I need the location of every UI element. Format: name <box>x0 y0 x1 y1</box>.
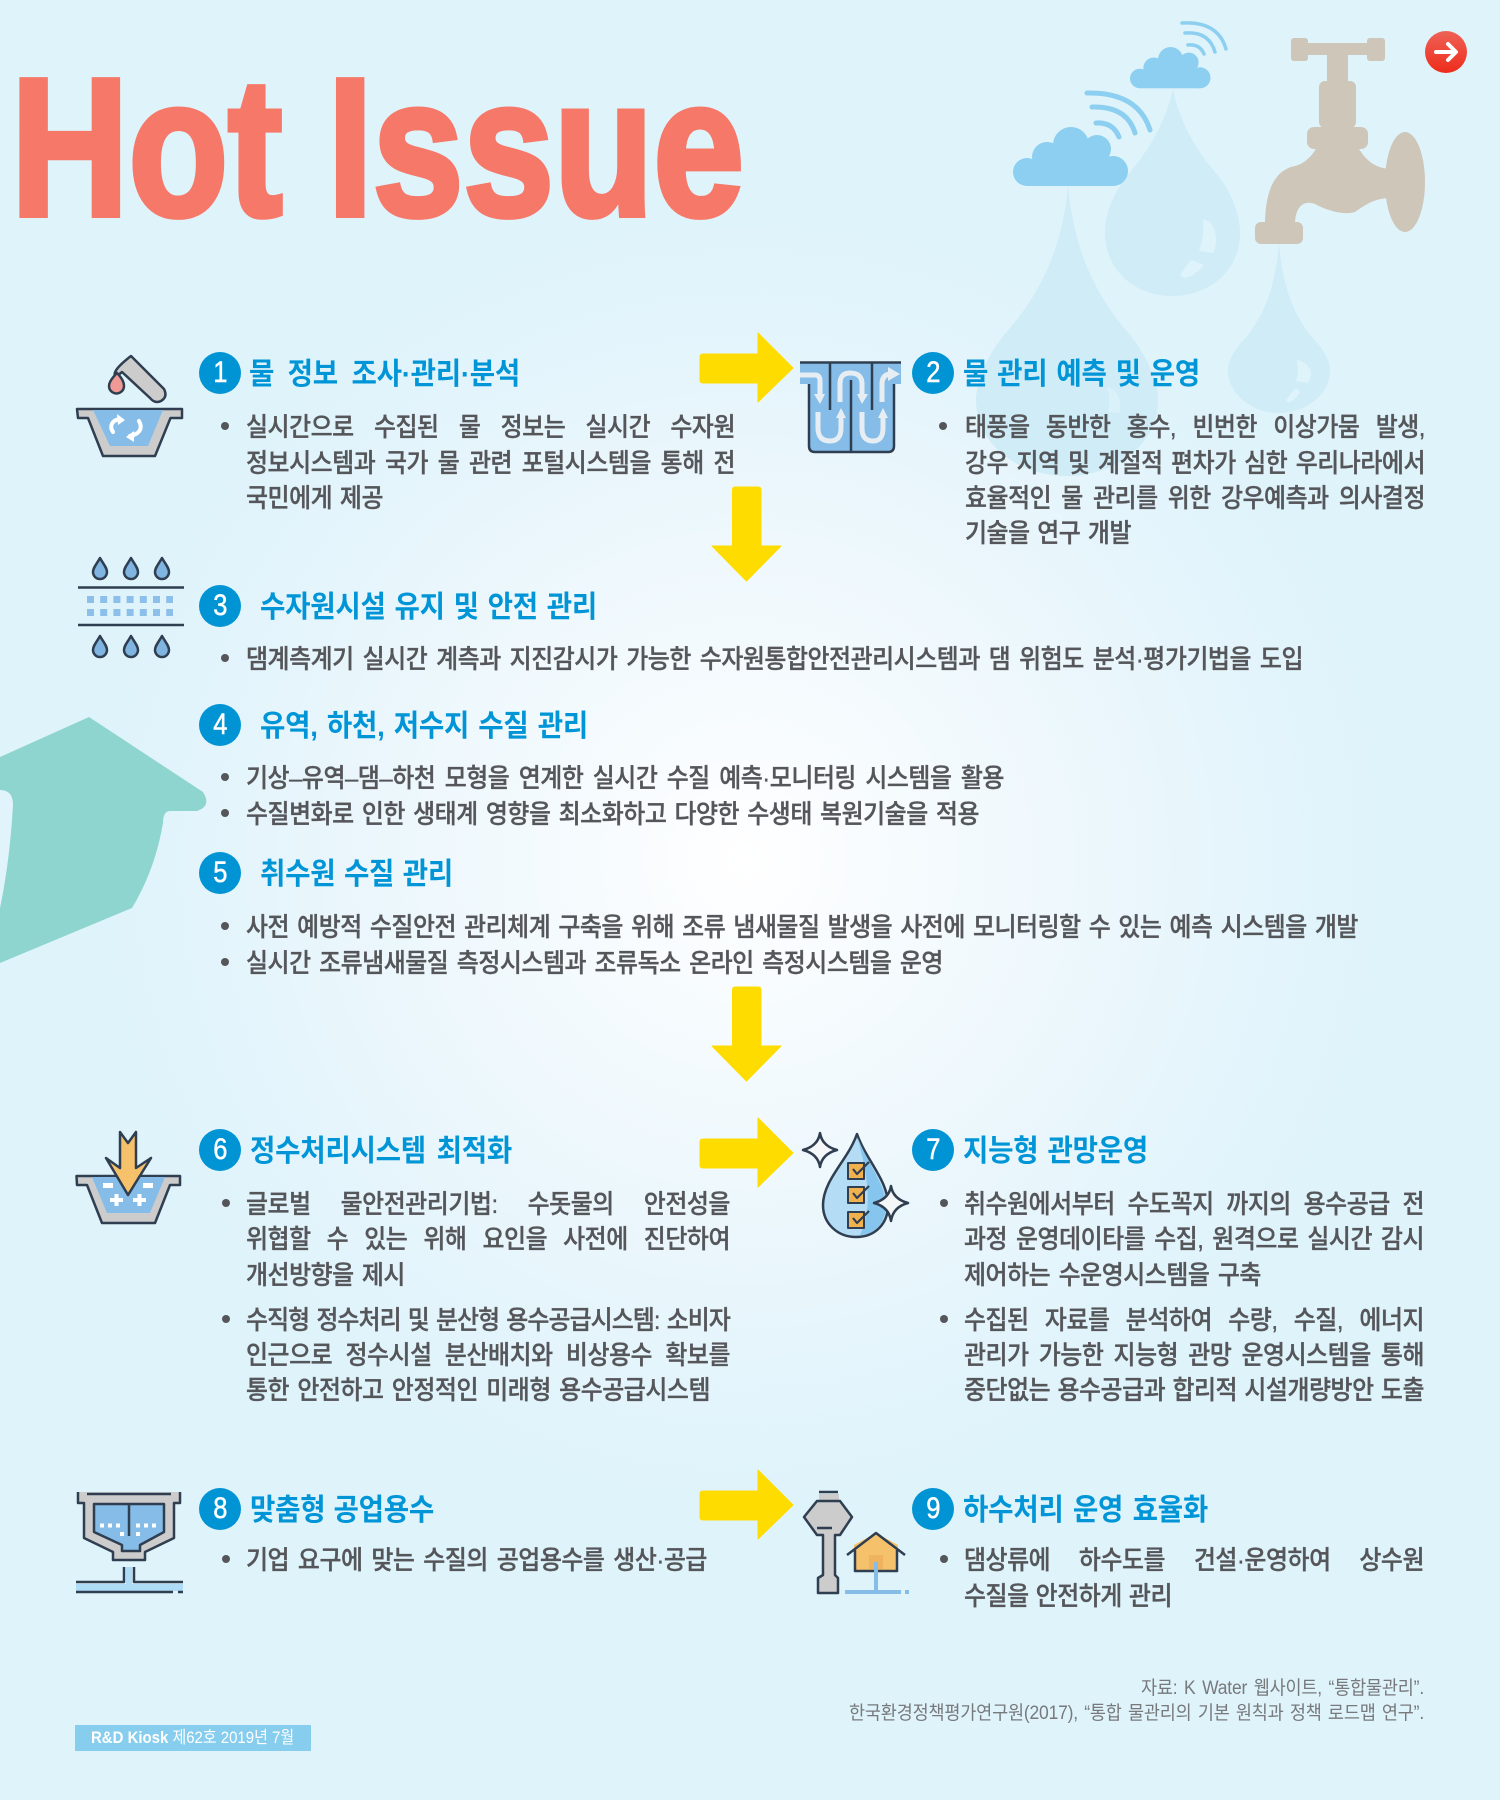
red next button <box>1425 31 1467 73</box>
icon: drops through filter <box>78 558 184 657</box>
number badge 9 <box>912 1488 954 1530</box>
issue badge: R&D Kiosk 제62호 2019년 7월 <box>91 1728 294 1747</box>
text block 9: 댐상류에 하수도를 건설·운영하여 상수원 <box>964 1545 1424 1575</box>
number badge 4 <box>199 704 241 746</box>
bullet <box>222 1555 230 1563</box>
text block 4: 수질변화로 인한 생태계 영향을 최소화하고 다양한 수생태 복원기술을 적용 <box>246 799 979 829</box>
bullet <box>221 922 229 930</box>
text block 6: 수직형 정수처리 및 분산형 용수공급시스템: 소비자 <box>246 1305 730 1335</box>
text block 1: 정보시스템과 국가 물 관련 포털시스템을 통해 전 <box>246 448 735 478</box>
bullet <box>221 773 229 781</box>
number badge 5: 5 <box>213 856 227 889</box>
heading 2: 물 관리 예측 및 운영 <box>963 358 1200 391</box>
panel: 7 smart pipe network <box>912 1129 1424 1405</box>
heading 8: 맞춤형 공업용수 <box>250 1494 434 1527</box>
cloud with signal right <box>1130 23 1226 88</box>
text block 5: 사전 예방적 수질안전 관리체계 구축을 위해 조류 냄새물질 발생을 사전에 모니터링할 수 있는 예측 시스템을 개발 <box>246 912 1358 942</box>
panel: 5 intake water quality <box>199 852 1358 978</box>
panel: 2 water forecast <box>912 352 1425 548</box>
text block 3: 댐계측계기 실시간 계측과 지진감시가 가능한 수자원통합안전관리시스템과 댐 위험도 분석·평가기법을 도입 <box>246 644 1303 674</box>
faucet <box>1255 38 1425 244</box>
bullet <box>940 1199 948 1207</box>
heading 9: 하수처리 운영 효율화 <box>963 1494 1208 1527</box>
heading 7: 지능형 관망운영 <box>963 1135 1148 1168</box>
text block 8: 기업 요구에 맞는 수질의 공업용수를 생산·공급 <box>246 1545 707 1575</box>
text block 2: 효율적인 물 관리를 위한 강우예측과 의사결정 <box>965 483 1425 513</box>
heading 1: 물 정보 조사·관리·분석 <box>249 358 520 391</box>
text block 1 <box>246 412 735 513</box>
text block 7 <box>964 1189 1424 1405</box>
title: Hot Issue <box>11 38 744 257</box>
text block 7: 과정 운영데이타를 수집, 원격으로 실시간 감시 <box>964 1224 1424 1254</box>
text block 2: 태풍을 동반한 홍수, 빈번한 이상가뭄 발생, <box>965 412 1425 442</box>
text block 5 <box>246 912 1358 978</box>
panel: 3 facility safety <box>199 585 1303 674</box>
icon: clarifier tank <box>76 1492 183 1592</box>
bullet <box>222 1315 230 1323</box>
number badge 1 <box>199 352 241 394</box>
number badge 3: 3 <box>213 589 227 622</box>
arrow: 1 to 2 <box>700 333 793 402</box>
source note: 한국환경정책평가연구원(2017), “통합 물관리의 기본 원칙과 정책 로드맵 연구”. <box>849 1703 1424 1724</box>
heading 6: 정수처리시스템 최적화 <box>250 1135 512 1168</box>
text block 1: 실시간으로 수집된 물 정보는 실시간 수자원 <box>246 412 735 442</box>
bullet <box>221 422 229 430</box>
text block 4 <box>246 763 1004 829</box>
text block 6: 인근으로 정수시설 분산배치와 비상용수 확보를 <box>246 1340 730 1370</box>
number badge 2: 2 <box>926 356 940 389</box>
number badge 7: 7 <box>926 1133 940 1166</box>
text block 7: 중단없는 용수공급과 합리적 시설개량방안 도출 <box>964 1375 1424 1405</box>
icon: drop with checklist <box>803 1133 908 1237</box>
number badge 8: 8 <box>213 1492 227 1525</box>
heading 4: 유역, 하천, 저수지 수질 관리 <box>260 710 588 743</box>
background water drops <box>976 89 1330 476</box>
icon: arrow into basin <box>76 1132 180 1223</box>
panel: 1 water information <box>199 352 735 513</box>
text block 9: 수질을 안전하게 관리 <box>964 1581 1172 1611</box>
text block 2 <box>965 412 1425 548</box>
panel: 6 purification optimisation <box>199 1129 730 1405</box>
arrow: 6 to 7 <box>700 1118 793 1187</box>
bullet <box>940 1315 948 1323</box>
icon: flow filter <box>800 362 901 452</box>
panel: 8 industrial water <box>199 1488 707 1575</box>
text block 6: 통한 안전하고 안정적인 미래형 용수공급시스템 <box>246 1375 710 1405</box>
text block 2: 기술을 연구 개발 <box>965 518 1131 548</box>
bullet <box>221 958 229 966</box>
source note: 자료: K Water 웹사이트, “통합물관리”. <box>1141 1678 1424 1699</box>
bullet <box>221 809 229 817</box>
text block 5: 실시간 조류냄새물질 측정시스템과 조류독소 온라인 측정시스템을 운영 <box>246 948 943 978</box>
bullet <box>222 1199 230 1207</box>
text block 6 <box>246 1189 730 1405</box>
cloud with signal left <box>1013 93 1150 186</box>
heading 3: 수자원시설 유지 및 안전 관리 <box>260 591 597 624</box>
issue badge <box>75 1725 311 1751</box>
text block 2: 강우 지역 및 계절적 편차가 심한 우리나라에서 <box>965 448 1425 478</box>
number badge 8 <box>199 1488 241 1530</box>
text block 6: 글로벌 물안전관리기법: 수돗물의 안전성을 <box>246 1189 730 1219</box>
number badge 6 <box>199 1129 241 1171</box>
number badge 7 <box>912 1129 954 1171</box>
bullet <box>940 1555 948 1563</box>
arrow: 8 to 9 <box>700 1470 793 1539</box>
text block 7: 취수원에서부터 수도꼭지 까지의 용수공급 전 <box>964 1189 1424 1219</box>
icon: water tower and house <box>804 1492 909 1594</box>
number badge 9: 9 <box>926 1492 940 1525</box>
bullet <box>939 422 947 430</box>
heading 5: 취수원 수질 관리 <box>260 858 453 891</box>
arrow: down to 6 <box>712 987 781 1081</box>
number badge 1: 1 <box>213 356 227 389</box>
panel: 9 sewage treatment <box>912 1488 1424 1611</box>
number badge 2 <box>912 352 954 394</box>
text block 7: 제어하는 수운영시스템을 구축 <box>964 1260 1261 1290</box>
panel: 4 basin water quality <box>199 704 1004 829</box>
source note <box>849 1678 1424 1724</box>
number badge 4: 4 <box>213 708 227 741</box>
decorative teal house shape <box>0 717 206 963</box>
number badge 5 <box>199 852 241 894</box>
text block 6: 개선방향을 제시 <box>246 1260 405 1290</box>
text block 1: 국민에게 제공 <box>246 483 383 513</box>
text block 4: 기상–유역–댐–하천 모형을 연계한 실시간 수질 예측·모니터링 시스템을 활용 <box>246 763 1004 793</box>
icon: pipette over basin <box>77 356 182 456</box>
arrow: down to 3 <box>712 487 781 581</box>
number badge 6: 6 <box>213 1133 227 1166</box>
text block 6: 위협할 수 있는 위해 요인을 사전에 진단하여 <box>246 1224 730 1254</box>
bullet <box>221 654 229 662</box>
number badge 3 <box>199 585 241 627</box>
text block 7: 관리가 가능한 지능형 관망 운영시스템을 통해 <box>964 1340 1424 1370</box>
text block 7: 수집된 자료를 분석하여 수량, 수질, 에너지 <box>964 1305 1424 1335</box>
text block 9 <box>964 1545 1424 1611</box>
